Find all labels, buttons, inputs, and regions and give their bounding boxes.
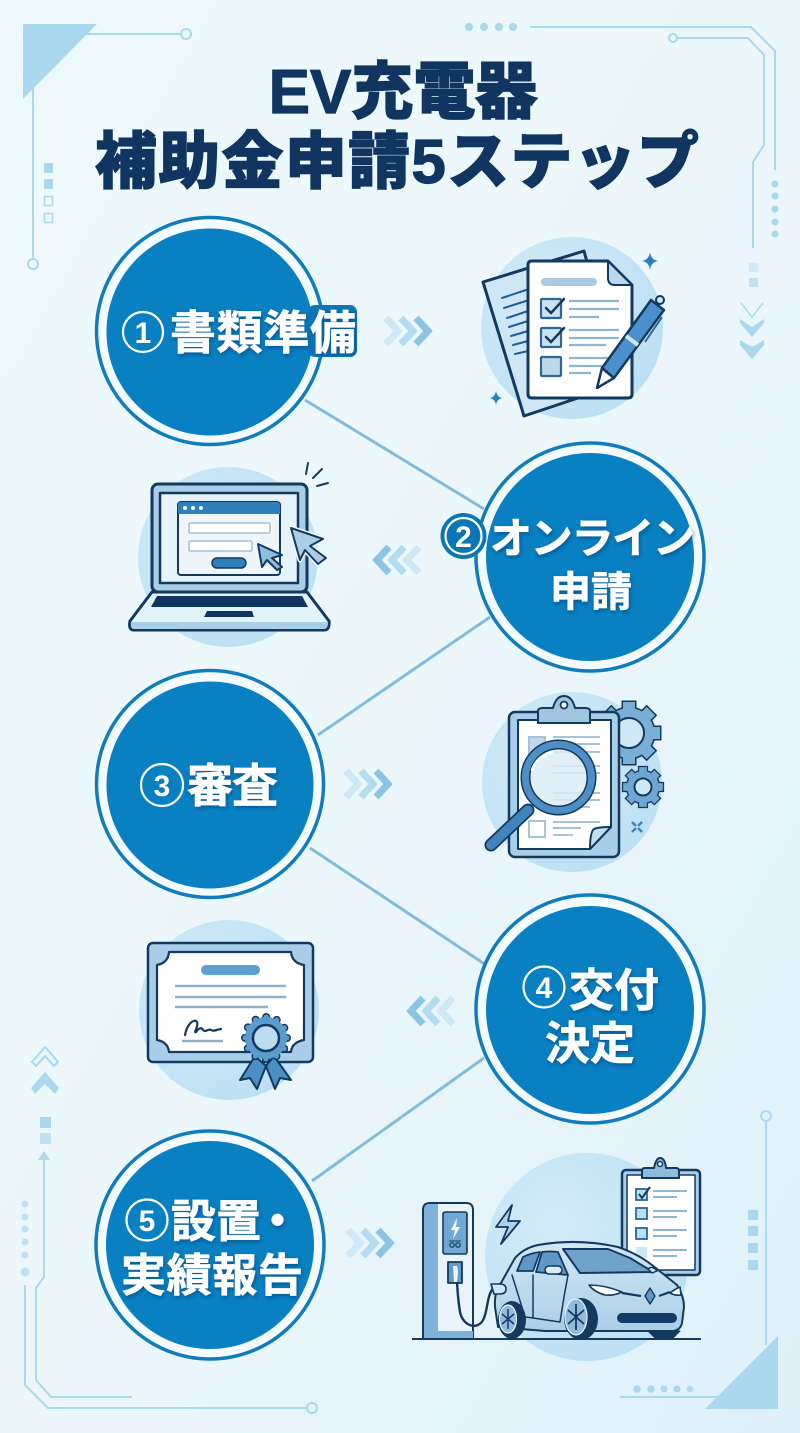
panel: step 2 circle [440,443,704,671]
icon: seal [240,1017,291,1089]
step 5 label [121,1196,303,1301]
icon: laptop with form [130,463,329,647]
arrows: step 2 to illustration [377,547,419,573]
step 2 label: 申請 [550,569,632,615]
step 2 label: オンライン [490,515,695,562]
icon: ground line [412,1338,701,1340]
decoration: top-left circuit corner [23,24,191,269]
number badge 2: 2 [455,521,472,554]
number badge 3: 3 [154,770,170,803]
icon: certificate [148,943,313,1062]
icon: electric car [491,1242,684,1340]
icon: cursors [258,463,328,570]
arrows: step 4 to illustration [411,998,453,1024]
title: 補助金申請5ステップ [95,128,699,197]
icon: certificate with seal [139,920,319,1100]
icon: clipboard [509,696,619,857]
number badge 5 [126,1200,168,1240]
step 2 label [490,515,695,615]
icon: checklist clipboard [622,1158,700,1275]
label plate: step 1 [308,305,357,357]
panel: step 4 circle [476,895,704,1123]
icon: back sheet [483,251,632,416]
number badge 5: 5 [139,1205,155,1238]
icon: magnifier [491,744,592,845]
icon: lightning bolt [496,1205,520,1244]
icon: gears [598,702,663,807]
step 3 label: 審査 [187,760,278,812]
number badge 4: 4 [536,972,553,1005]
arrows: step 5 to illustration [348,1230,390,1256]
icon: charger [423,1203,473,1338]
icon: laptop screen [152,484,307,592]
panel: step 1 circle [96,218,357,444]
step 5 label: 実績報告 [121,1250,303,1301]
number badge 2 [440,513,486,559]
arrows: step 3 to illustration [346,771,388,797]
icon: sparkles [490,252,658,405]
icon: laptop base [130,592,329,630]
arrows: step 1 to illustration [386,318,428,344]
number badge 4 [524,966,564,1008]
decoration: top-right circuit corner [465,23,778,359]
step 4 label [545,965,659,1069]
number badge 3 [141,764,183,806]
icon: pen [597,296,664,388]
number badge 1: 1 [135,317,151,350]
number badge 1 [123,312,163,352]
icon: sparkle mark [632,822,642,832]
decoration: bottom-left circuit corner [20,1047,317,1413]
icon: charging cable [457,1282,500,1326]
step 4 label: 交付 [569,965,659,1016]
step 1 label: 書類準備 [170,307,356,359]
title: EV充電器 [269,58,537,127]
panel: step 3 circle [96,670,324,898]
connector lines between steps [305,400,490,1181]
icon: clipboard with magnifier and gears [482,692,663,872]
step 4 label: 決定 [545,1018,635,1069]
panel: step 5 circle [96,1131,324,1359]
decoration: bottom-right circuit corner [620,1111,778,1409]
icon: front sheet with checklist [528,261,632,398]
icon: documents and pen [481,237,664,419]
title [95,58,699,197]
icon: EV charging with checklist [412,1153,701,1361]
step 5 label: 設置・ [171,1196,300,1247]
